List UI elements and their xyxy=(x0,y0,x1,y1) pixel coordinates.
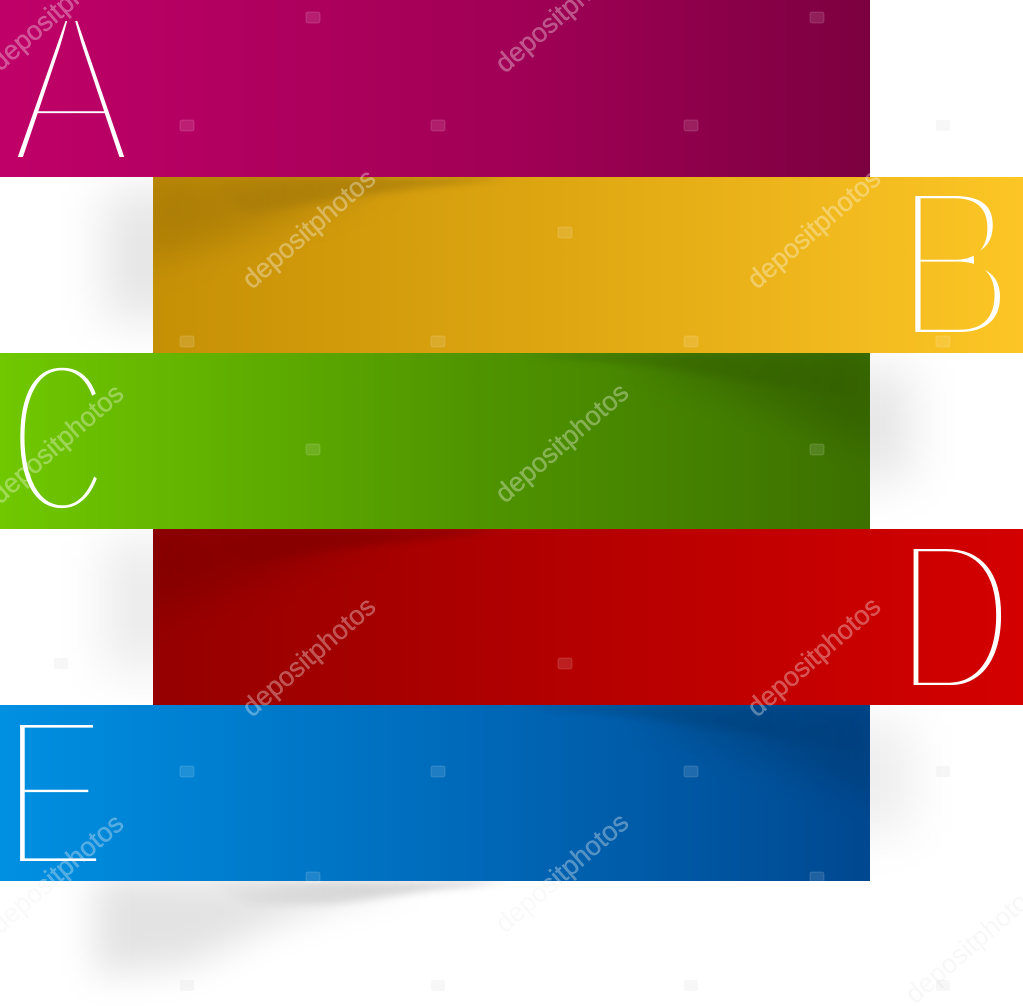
watermark: depositphotos text: depositphotos xyxy=(489,377,634,509)
letter E: E xyxy=(2,672,108,915)
watermark: depositphotos text: depositphotos xyxy=(489,807,634,939)
panel: ribbon B xyxy=(153,177,1023,353)
letter B: B xyxy=(895,143,1015,386)
watermark: depositphotos text: depositphotos xyxy=(489,807,634,939)
panel: ribbon A xyxy=(0,0,870,211)
shadow: left of ribbon B xyxy=(94,181,153,329)
shadow: right of ribbon E xyxy=(870,724,912,830)
panel: ribbon D xyxy=(153,529,1023,716)
shadow: right of ribbon C xyxy=(870,362,920,488)
shadow: left of ribbon D xyxy=(100,538,153,672)
letter C: C xyxy=(9,316,108,560)
shadow: below ribbon E xyxy=(95,875,515,975)
watermark: depositphotos text: depositphotos xyxy=(741,163,886,295)
watermark: depositphotos text: depositphotos xyxy=(236,591,381,723)
panel: ribbon C xyxy=(0,316,880,560)
letter D: D xyxy=(895,496,1014,739)
panel: ribbon E xyxy=(0,672,880,915)
watermark: depositphotos text: depositphotos xyxy=(236,163,381,295)
watermark: depositphotos text: depositphotos xyxy=(741,591,886,723)
